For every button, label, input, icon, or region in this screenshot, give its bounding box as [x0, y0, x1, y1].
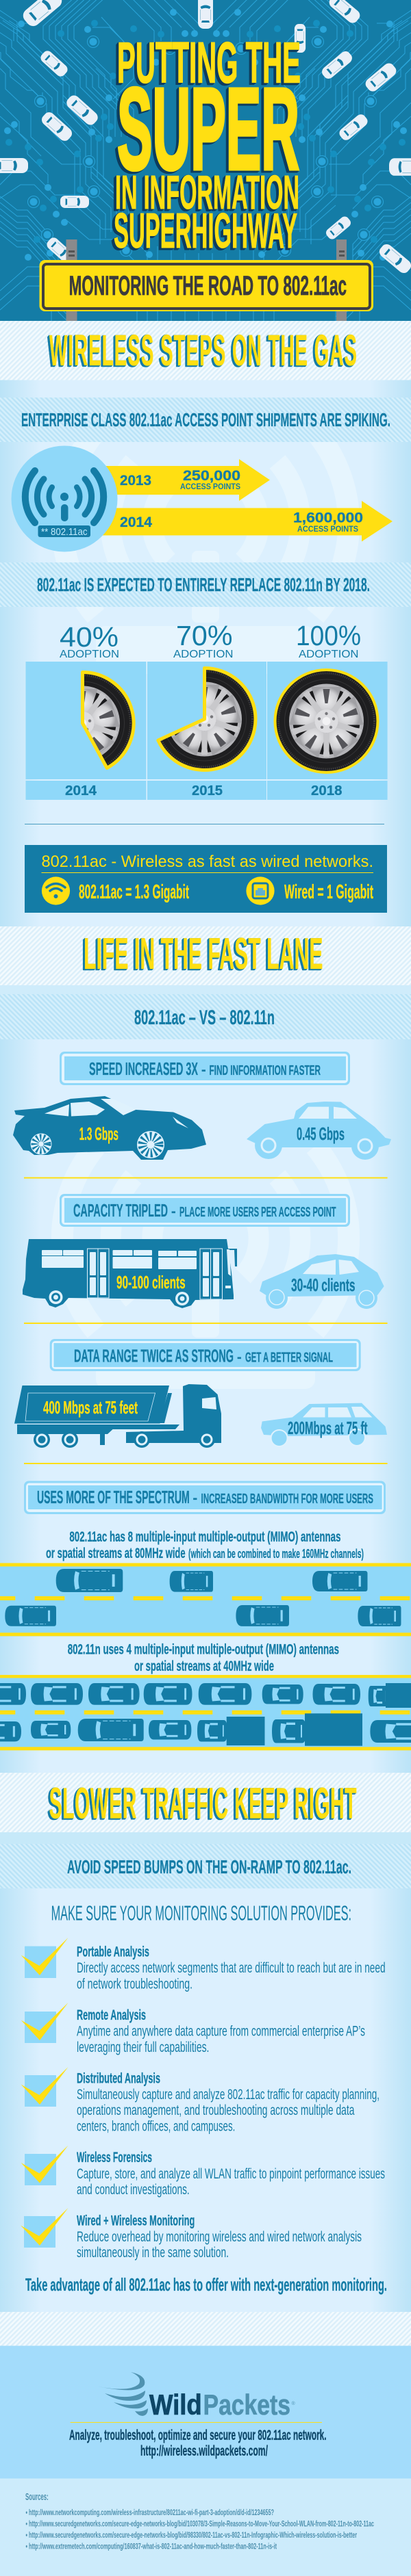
- panel: 2018 adoption: 100%: [296, 620, 361, 651]
- icon: 802.11ac wifi badge: ** 802.11ac: [41, 526, 88, 538]
- banner: life in the fast lane: [0, 926, 411, 985]
- logo: wildpackets: ®: [292, 2401, 296, 2406]
- footer panel: [0, 2345, 411, 2478]
- text: 802.11ac mimo: or spatial streams at 80MHz wide: [46, 1545, 186, 1561]
- car: porsche 1.3 Gbps: [13, 1096, 206, 1160]
- logo: wildpackets: Packets: [203, 2389, 290, 2421]
- car: porsche 1.3 Gbps: 1.3 Gbps: [79, 1123, 119, 1144]
- text: analyze troubleshoot: http://wireless.wildpackets.com/: [140, 2443, 268, 2459]
- panel: 2014 adoption: 40%: [60, 621, 119, 653]
- panel: 2015 adoption: 70%: [176, 620, 233, 651]
- callout: wireless as fast as wired: 802.11ac = 1.3 Gigabit: [79, 881, 189, 903]
- icon: 802.11ac wifi badge: [11, 446, 118, 551]
- label: data range: -: [237, 1350, 242, 1365]
- sources panel: Sources:: [25, 2491, 49, 2503]
- label: speed increased: -: [201, 1063, 206, 1078]
- item: remote analysis: leveraging their full capabilities.: [77, 2040, 209, 2055]
- panel: 2015 adoption: ADOPTION: [173, 649, 233, 660]
- heading: avoid speed bumps: [0, 1844, 411, 1888]
- panel: 2018 adoption: ADOPTION: [299, 649, 359, 660]
- panel: 2015 adoption: [147, 620, 266, 800]
- logo: wildpackets: Wild: [149, 2389, 202, 2421]
- item: wireless forensics: Wireless Forensics: [77, 2150, 152, 2165]
- item: wired and wireless monitoring: [21, 2208, 362, 2261]
- icon: wifi: [42, 876, 70, 905]
- item: remote analysis: [21, 2003, 365, 2055]
- bus: 90-100 clients: [23, 1239, 237, 1308]
- panel: 2015 adoption: 2015: [192, 783, 223, 798]
- item: wired and wireless monitoring: Wired + Wireless Monitoring: [77, 2213, 195, 2229]
- arrow: 2014 shipments: 2014: [120, 515, 152, 530]
- arrow: 2013 shipments: ACCESS POINTS: [180, 482, 240, 491]
- text: 802.11n mimo: [68, 1641, 339, 1674]
- heading: shipments: [0, 398, 411, 442]
- callout: wireless as fast as wired: 802.11ac - Wireless as fast as wired networks.: [41, 853, 373, 871]
- label: capacity tripled: [60, 1194, 350, 1227]
- item: wireless forensics: [21, 2146, 385, 2198]
- road: 802.11n congested traffic: [0, 1675, 411, 1750]
- item: distributed analysis: centers, branch offices, and campuses.: [77, 2119, 235, 2135]
- panel: 2014 adoption: [26, 621, 147, 800]
- small car: 30-40 clients: 30-40 clients: [291, 1275, 356, 1295]
- arrow: 2013 shipments: [96, 459, 270, 501]
- label: capacity tripled: CAPACITY TRIPLED: [73, 1200, 168, 1221]
- arrow: 2014 shipments: 1,600,000: [293, 510, 363, 525]
- heading: replace 802.11n: [0, 562, 411, 607]
- item: portable analysis: Portable Analysis: [77, 1944, 149, 1960]
- panel: 2014 adoption: ADOPTION: [60, 649, 119, 660]
- label: speed increased: FIND INFORMATION FASTER: [210, 1063, 321, 1078]
- sources panel: [0, 2478, 411, 2576]
- road sign: [40, 239, 373, 322]
- truck: 400 Mbps at 75 feet: [14, 1384, 221, 1448]
- item: portable analysis: [21, 1938, 386, 1992]
- small car: 30-40 clients: [260, 1254, 384, 1309]
- truck: 400 Mbps at 75 feet: 400 Mbps at 75 feet: [43, 1397, 138, 1418]
- label: data range: DATA RANGE TWICE AS STRONG: [74, 1345, 234, 1366]
- text: 802.11n mimo: or spatial streams at 40MHz wide: [134, 1658, 274, 1674]
- label: speed increased: [60, 1052, 350, 1085]
- item: wired and wireless monitoring: simultaneously in the same solution.: [77, 2245, 229, 2261]
- panel: 2014 adoption: 2014: [65, 783, 97, 798]
- car: beetle 0.45 Gbps: [247, 1102, 391, 1160]
- panel: 2018 adoption: [267, 620, 388, 800]
- wagon: 200Mbps at 75 ft: [261, 1403, 387, 1446]
- item: wireless forensics: and conduct investigations.: [77, 2182, 190, 2198]
- item: distributed analysis: Distributed Analysis: [77, 2070, 160, 2087]
- label: uses more of the spectrum: -: [193, 1491, 197, 1506]
- label: capacity tripled: -: [171, 1204, 176, 1219]
- bus: 90-100 clients: 90-100 clients: [116, 1272, 186, 1292]
- title: [114, 31, 301, 259]
- road: 802.11ac traffic: [0, 1563, 411, 1637]
- item: remote analysis: Remote Analysis: [77, 2007, 146, 2023]
- label: uses more of the spectrum: [24, 1481, 386, 1514]
- heading: 802.11ac vs 802.11n: [0, 994, 411, 1039]
- text: analyze troubleshoot: [69, 2427, 326, 2459]
- heading: 802.11ac vs 802.11n: 802.11ac – VS – 802.11n: [134, 1006, 275, 1029]
- label: data range: GET A BETTER SIGNAL: [245, 1349, 333, 1366]
- item: distributed analysis: [21, 2067, 379, 2135]
- label: uses more of the spectrum: USES MORE OF THE SPECTRUM: [37, 1487, 190, 1507]
- arrow: 2014 shipments: [96, 501, 393, 542]
- logo: wildpackets: [98, 2372, 296, 2421]
- panel: 2018 adoption: 2018: [311, 783, 342, 798]
- divider band: [0, 2312, 411, 2345]
- hero background: [0, 0, 411, 346]
- arrow: 2013 shipments: 250,000: [183, 468, 240, 484]
- car: beetle 0.45 Gbps: 0.45 Gbps: [297, 1123, 345, 1144]
- callout: wireless as fast as wired: [25, 845, 387, 913]
- item: portable analysis: of network troubleshooting.: [77, 1976, 192, 1992]
- arrow: 2013 shipments: 2013: [120, 473, 151, 489]
- arrow: 2014 shipments: ACCESS POINTS: [297, 524, 358, 534]
- text: 802.11ac mimo: [46, 1528, 364, 1561]
- icon: ethernet port: [246, 876, 275, 905]
- label: data range: [50, 1339, 361, 1371]
- hero cars: [0, 0, 411, 275]
- label: speed increased: SPEED INCREASED 3X: [89, 1058, 198, 1079]
